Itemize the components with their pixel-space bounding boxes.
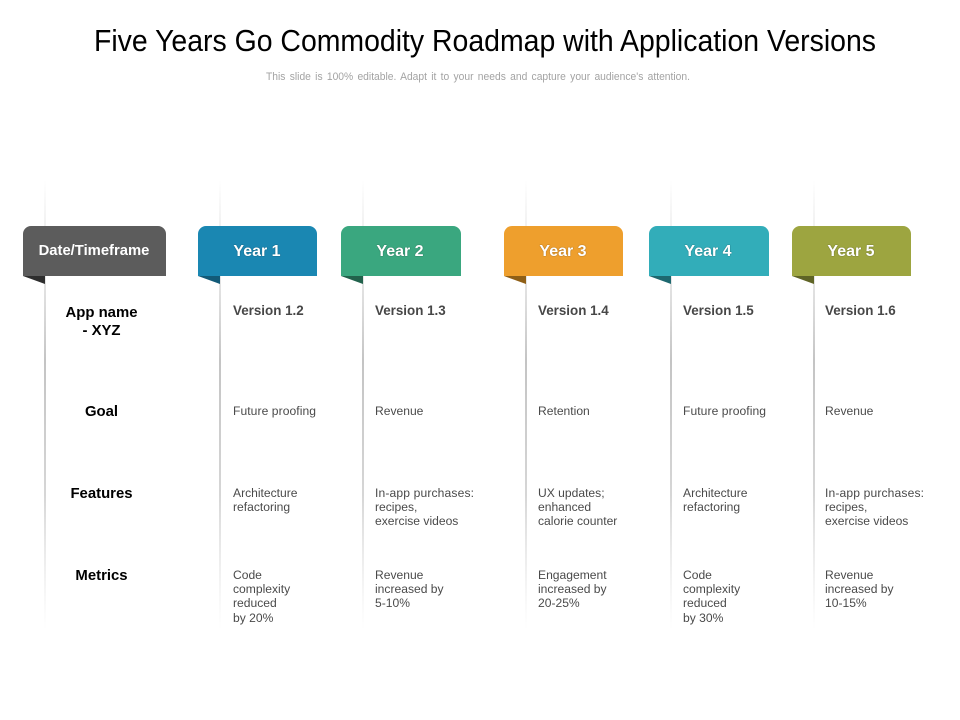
features: exercise videos [375, 514, 458, 528]
metrics: reduced [233, 596, 277, 610]
metrics: 5-10% [375, 596, 410, 610]
version: Version 1.2 [233, 303, 304, 318]
features: recipes, [825, 500, 867, 514]
goal: Revenue [825, 404, 874, 418]
header: year 2: Year 2 [376, 243, 424, 260]
row label: goal: Goal [85, 404, 118, 420]
metrics: Code [233, 568, 262, 582]
version: Version 1.6 [825, 303, 896, 318]
metrics: increased by [375, 582, 445, 596]
column: year 1 [198, 180, 317, 630]
features: refactoring [233, 500, 290, 514]
version: Version 1.3 [375, 303, 446, 318]
features: refactoring [683, 500, 740, 514]
goal: Revenue [375, 404, 424, 418]
features: In-app purchases: [825, 486, 924, 500]
metrics: increased by [825, 582, 895, 596]
header: year 5: Year 5 [827, 243, 875, 260]
row label: app name: App name [66, 305, 137, 321]
header: year 1 [198, 226, 317, 276]
row label: app name: - XYZ [82, 323, 121, 339]
version: Version 1.4 [538, 303, 609, 318]
header: year 4 [649, 226, 769, 276]
header: year 3: Year 3 [539, 243, 587, 260]
title: Five Years Go Commodity Roadmap with Application Versions [94, 23, 876, 58]
metrics: Code [683, 568, 712, 582]
features: calorie counter [538, 514, 617, 528]
header: year 5 [792, 226, 911, 276]
features: In-app purchases: [375, 486, 474, 500]
column: row labels [23, 180, 166, 630]
header: year 4: Year 4 [684, 243, 732, 260]
header: year 1: Year 1 [233, 243, 281, 260]
metrics: by 20% [233, 611, 274, 625]
features: enhanced [538, 500, 591, 514]
metrics: Revenue [375, 568, 424, 582]
metrics: by 30% [683, 611, 724, 625]
column: year 3 [504, 180, 623, 630]
subtitle: This slide is 100% editable. Adapt it to your needs and capture your audience's attention. [266, 71, 690, 83]
goal: Future proofing [683, 404, 766, 418]
features: Architecture [683, 486, 748, 500]
column: year 4 [649, 180, 769, 630]
goal: Retention [538, 404, 590, 418]
metrics: reduced [683, 596, 727, 610]
features: recipes, [375, 500, 417, 514]
version: Version 1.5 [683, 303, 754, 318]
header: date/timeframe [23, 226, 166, 276]
metrics: complexity [233, 582, 291, 596]
features: Architecture [233, 486, 298, 500]
column: year 5 [792, 180, 924, 630]
header: year 2 [341, 226, 461, 276]
header: date/timeframe: Date/Timeframe [39, 243, 149, 259]
row label: metrics: Metrics [75, 568, 128, 584]
metrics: Revenue [825, 568, 874, 582]
column: year 2 [341, 180, 474, 630]
features: UX updates; [538, 486, 605, 500]
metrics: 10-15% [825, 596, 867, 610]
metrics: Engagement [538, 568, 607, 582]
header: year 3 [504, 226, 623, 276]
metrics: complexity [683, 582, 741, 596]
metrics: increased by [538, 582, 608, 596]
goal: Future proofing [233, 404, 316, 418]
features: exercise videos [825, 514, 908, 528]
row label: features: Features [70, 486, 133, 502]
metrics: 20-25% [538, 596, 580, 610]
